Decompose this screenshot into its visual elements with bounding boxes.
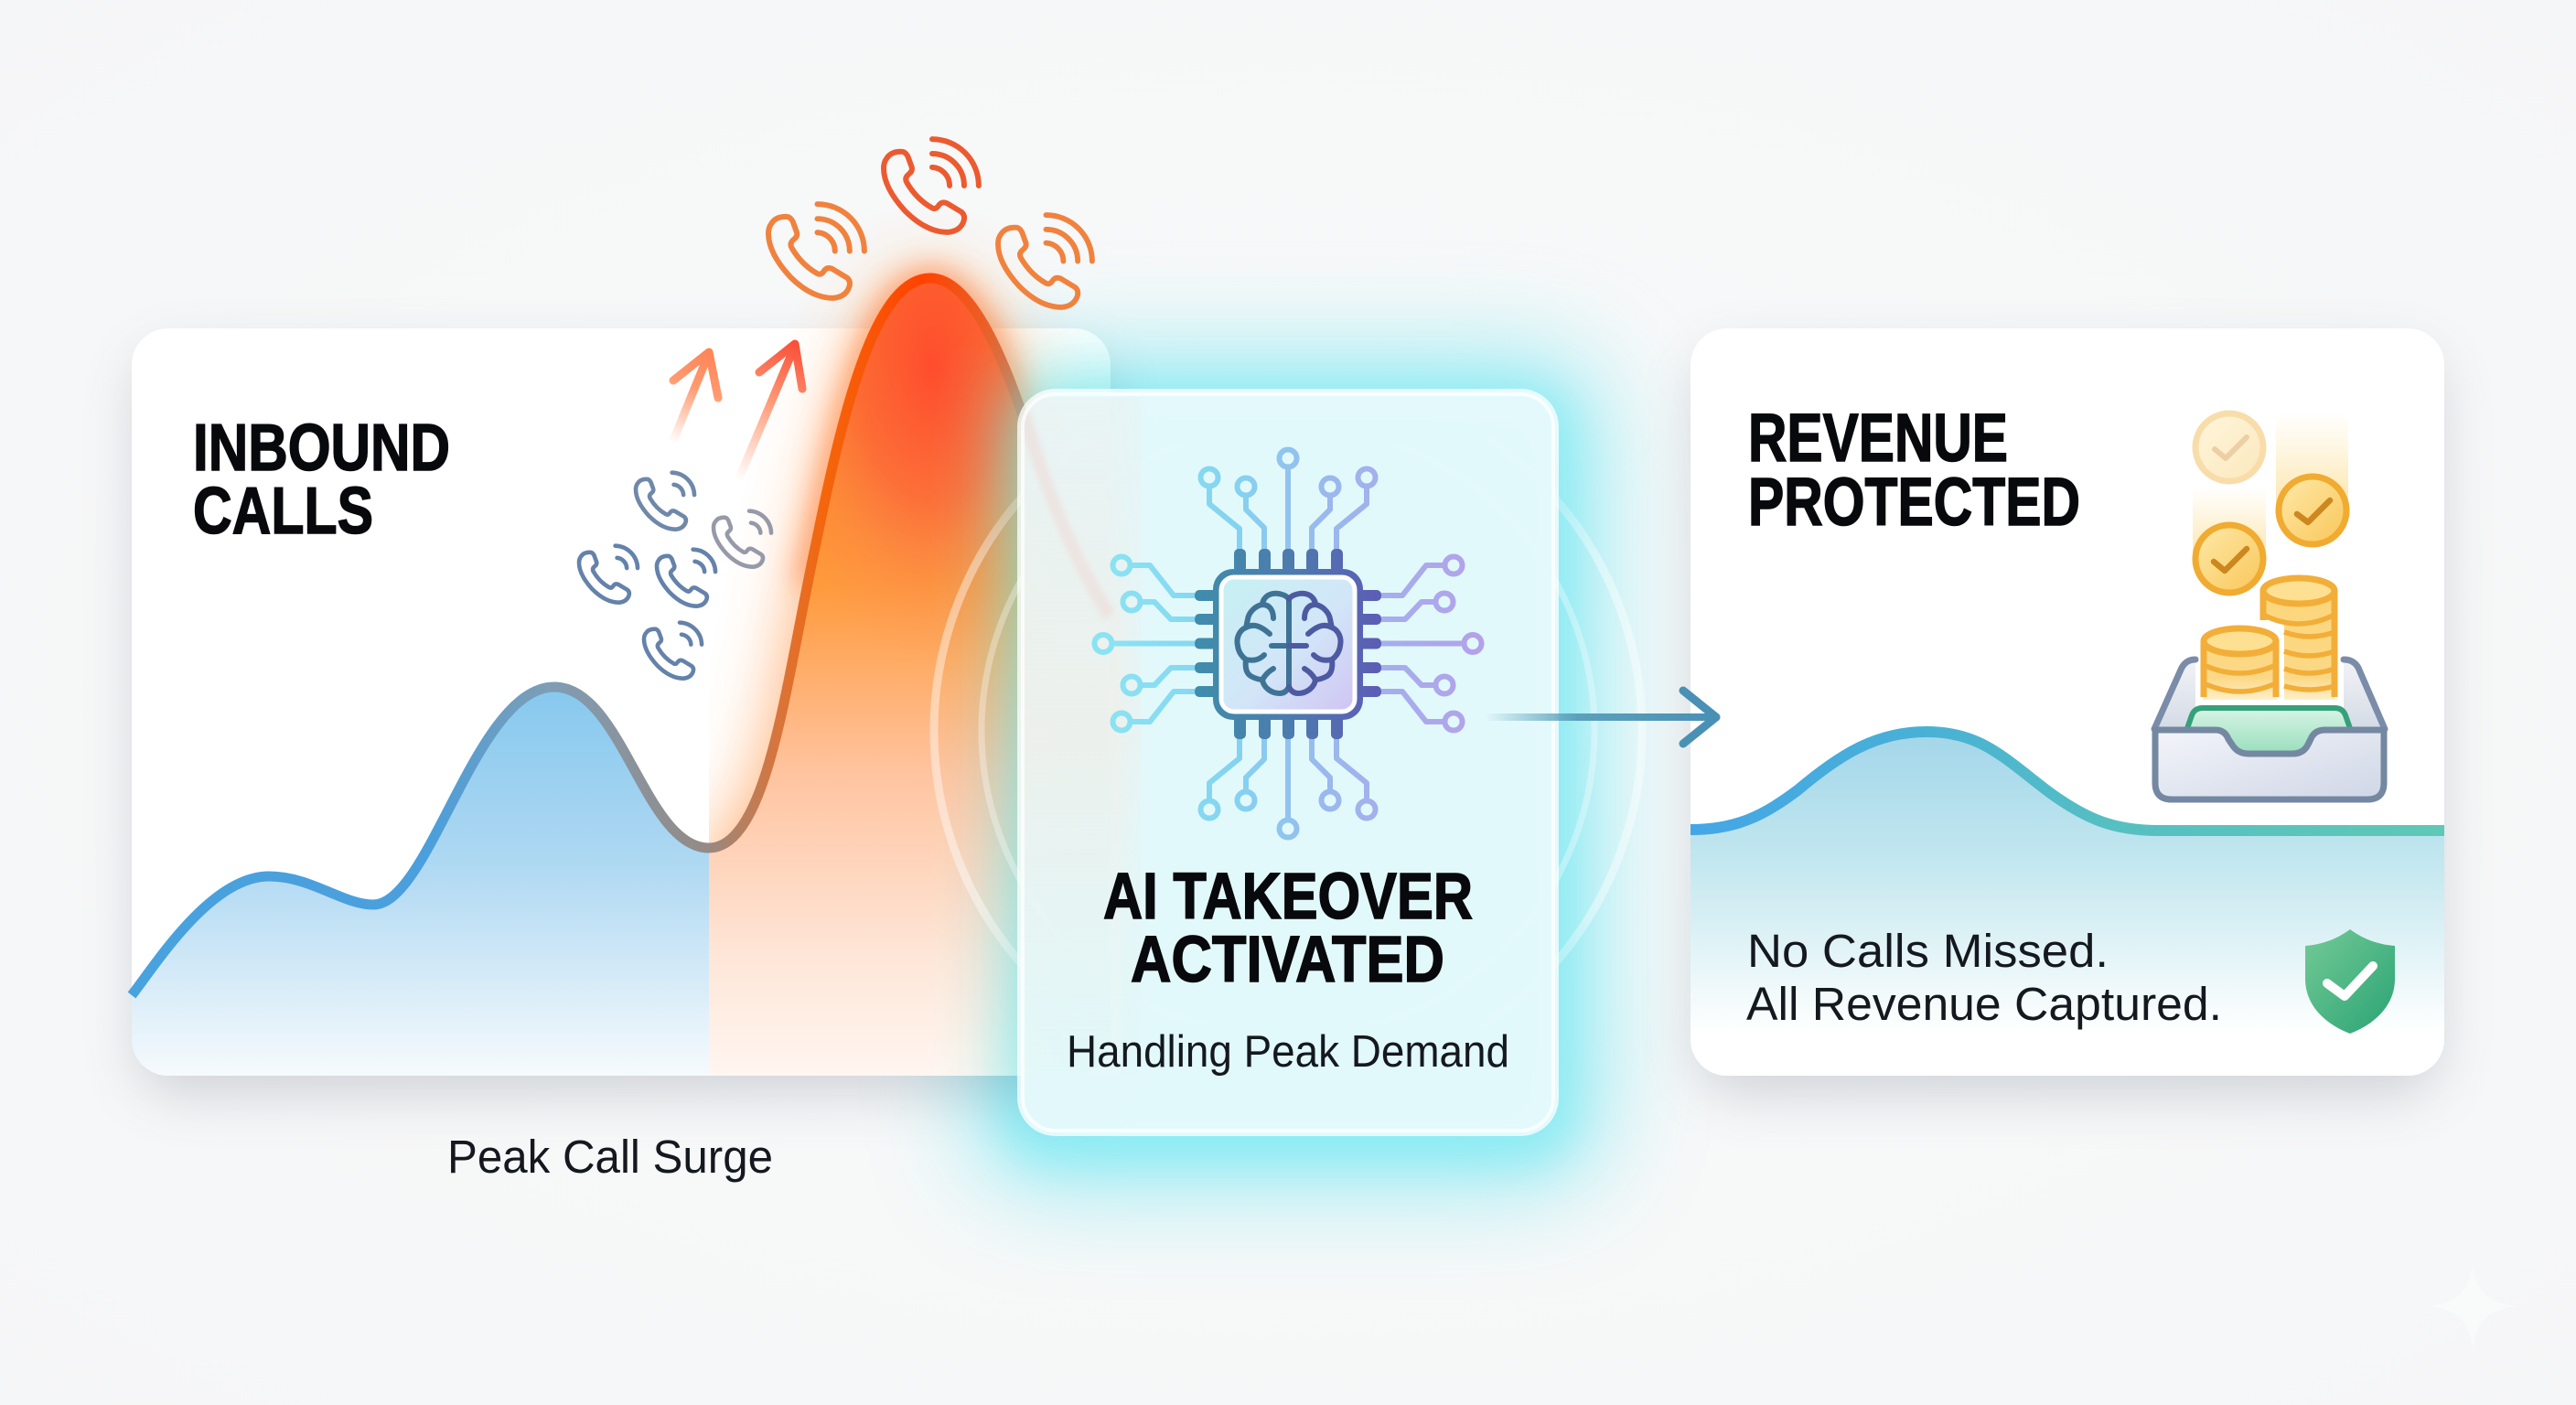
arrow: AI to revenue — [1485, 691, 1716, 744]
sparkle watermark — [2430, 1264, 2516, 1348]
icon: phone 4 — [657, 550, 715, 606]
heading: inbound calls: CALLS — [193, 475, 373, 548]
arrow: right — [738, 344, 802, 480]
AI takeover glow behind cards — [970, 352, 1605, 1189]
icon: coin tray — [2154, 578, 2385, 799]
tray side walls — [2154, 660, 2195, 729]
revenue area — [1690, 737, 2444, 1010]
arrow: left — [672, 352, 718, 443]
orange glow around surge — [709, 232, 1059, 843]
panel: AI takeover — [1021, 392, 1555, 1132]
heading: revenue protected: PROTECTED — [1748, 464, 2080, 540]
circuit traces — [1094, 450, 1482, 838]
heading: revenue protected — [1748, 400, 2080, 540]
icon: phone top — [884, 139, 979, 232]
icon: phone 2 — [714, 511, 771, 567]
chip body — [1213, 569, 1363, 720]
text: no calls missed: No Calls Missed. — [1747, 925, 2109, 977]
heading: AI takeover activated: ACTIVATED — [1131, 924, 1444, 996]
icon: brain — [1237, 594, 1341, 693]
icon: shield check — [2305, 929, 2395, 1034]
card surface — [1690, 328, 2444, 1076]
heading: revenue protected: REVENUE — [1748, 400, 2008, 476]
call volume curve — [132, 278, 1034, 995]
icons: calm phones — [579, 473, 771, 679]
text: no calls missed: All Revenue Captured. — [1746, 978, 2222, 1030]
panel: inbound calls — [115, 232, 1122, 1116]
surge heat area — [709, 278, 1121, 1076]
coin stack: tall — [2263, 578, 2334, 700]
icon: phone 3 — [579, 546, 638, 603]
card surface — [132, 328, 1111, 1076]
heading: AI takeover activated — [1103, 861, 1473, 996]
blue area under the call curve — [132, 687, 709, 1076]
surge arrows — [672, 344, 802, 480]
icon: falling coins — [2193, 412, 2348, 593]
coin: faded — [2195, 413, 2263, 481]
heading: inbound calls: INBOUND — [193, 412, 450, 485]
subheading: handling peak demand: Handling Peak Demand — [1067, 1027, 1509, 1077]
coin stack: short — [2204, 628, 2276, 700]
icon: phone 1 — [636, 473, 694, 530]
chip pins — [1195, 549, 1381, 739]
icons: ringing phones — [768, 139, 1092, 307]
tray front — [2155, 730, 2384, 799]
text: no calls missed — [1746, 925, 2222, 1030]
icon: AI chip — [1094, 450, 1482, 838]
faint curve behind the glass — [1023, 411, 1110, 616]
heading: inbound calls — [193, 412, 450, 548]
heading: AI takeover activated: AI TAKEOVER — [1103, 861, 1473, 933]
glow washing over the card edge — [954, 328, 1111, 1076]
revenue curve — [1690, 732, 2444, 831]
frosted tint from the surge behind the glass — [1025, 451, 1136, 885]
icon: phone 5 — [644, 623, 702, 679]
coin: left — [2195, 525, 2263, 593]
panel: revenue protected — [1690, 328, 2444, 1094]
pulse rings — [929, 497, 1647, 965]
banknote — [2185, 708, 2352, 761]
caption: peak call surge: Peak Call Surge — [447, 1131, 773, 1183]
coin: right — [2279, 477, 2346, 544]
card border — [1021, 392, 1555, 1132]
icon: phone left — [768, 204, 864, 298]
icon: phone right — [998, 215, 1092, 307]
